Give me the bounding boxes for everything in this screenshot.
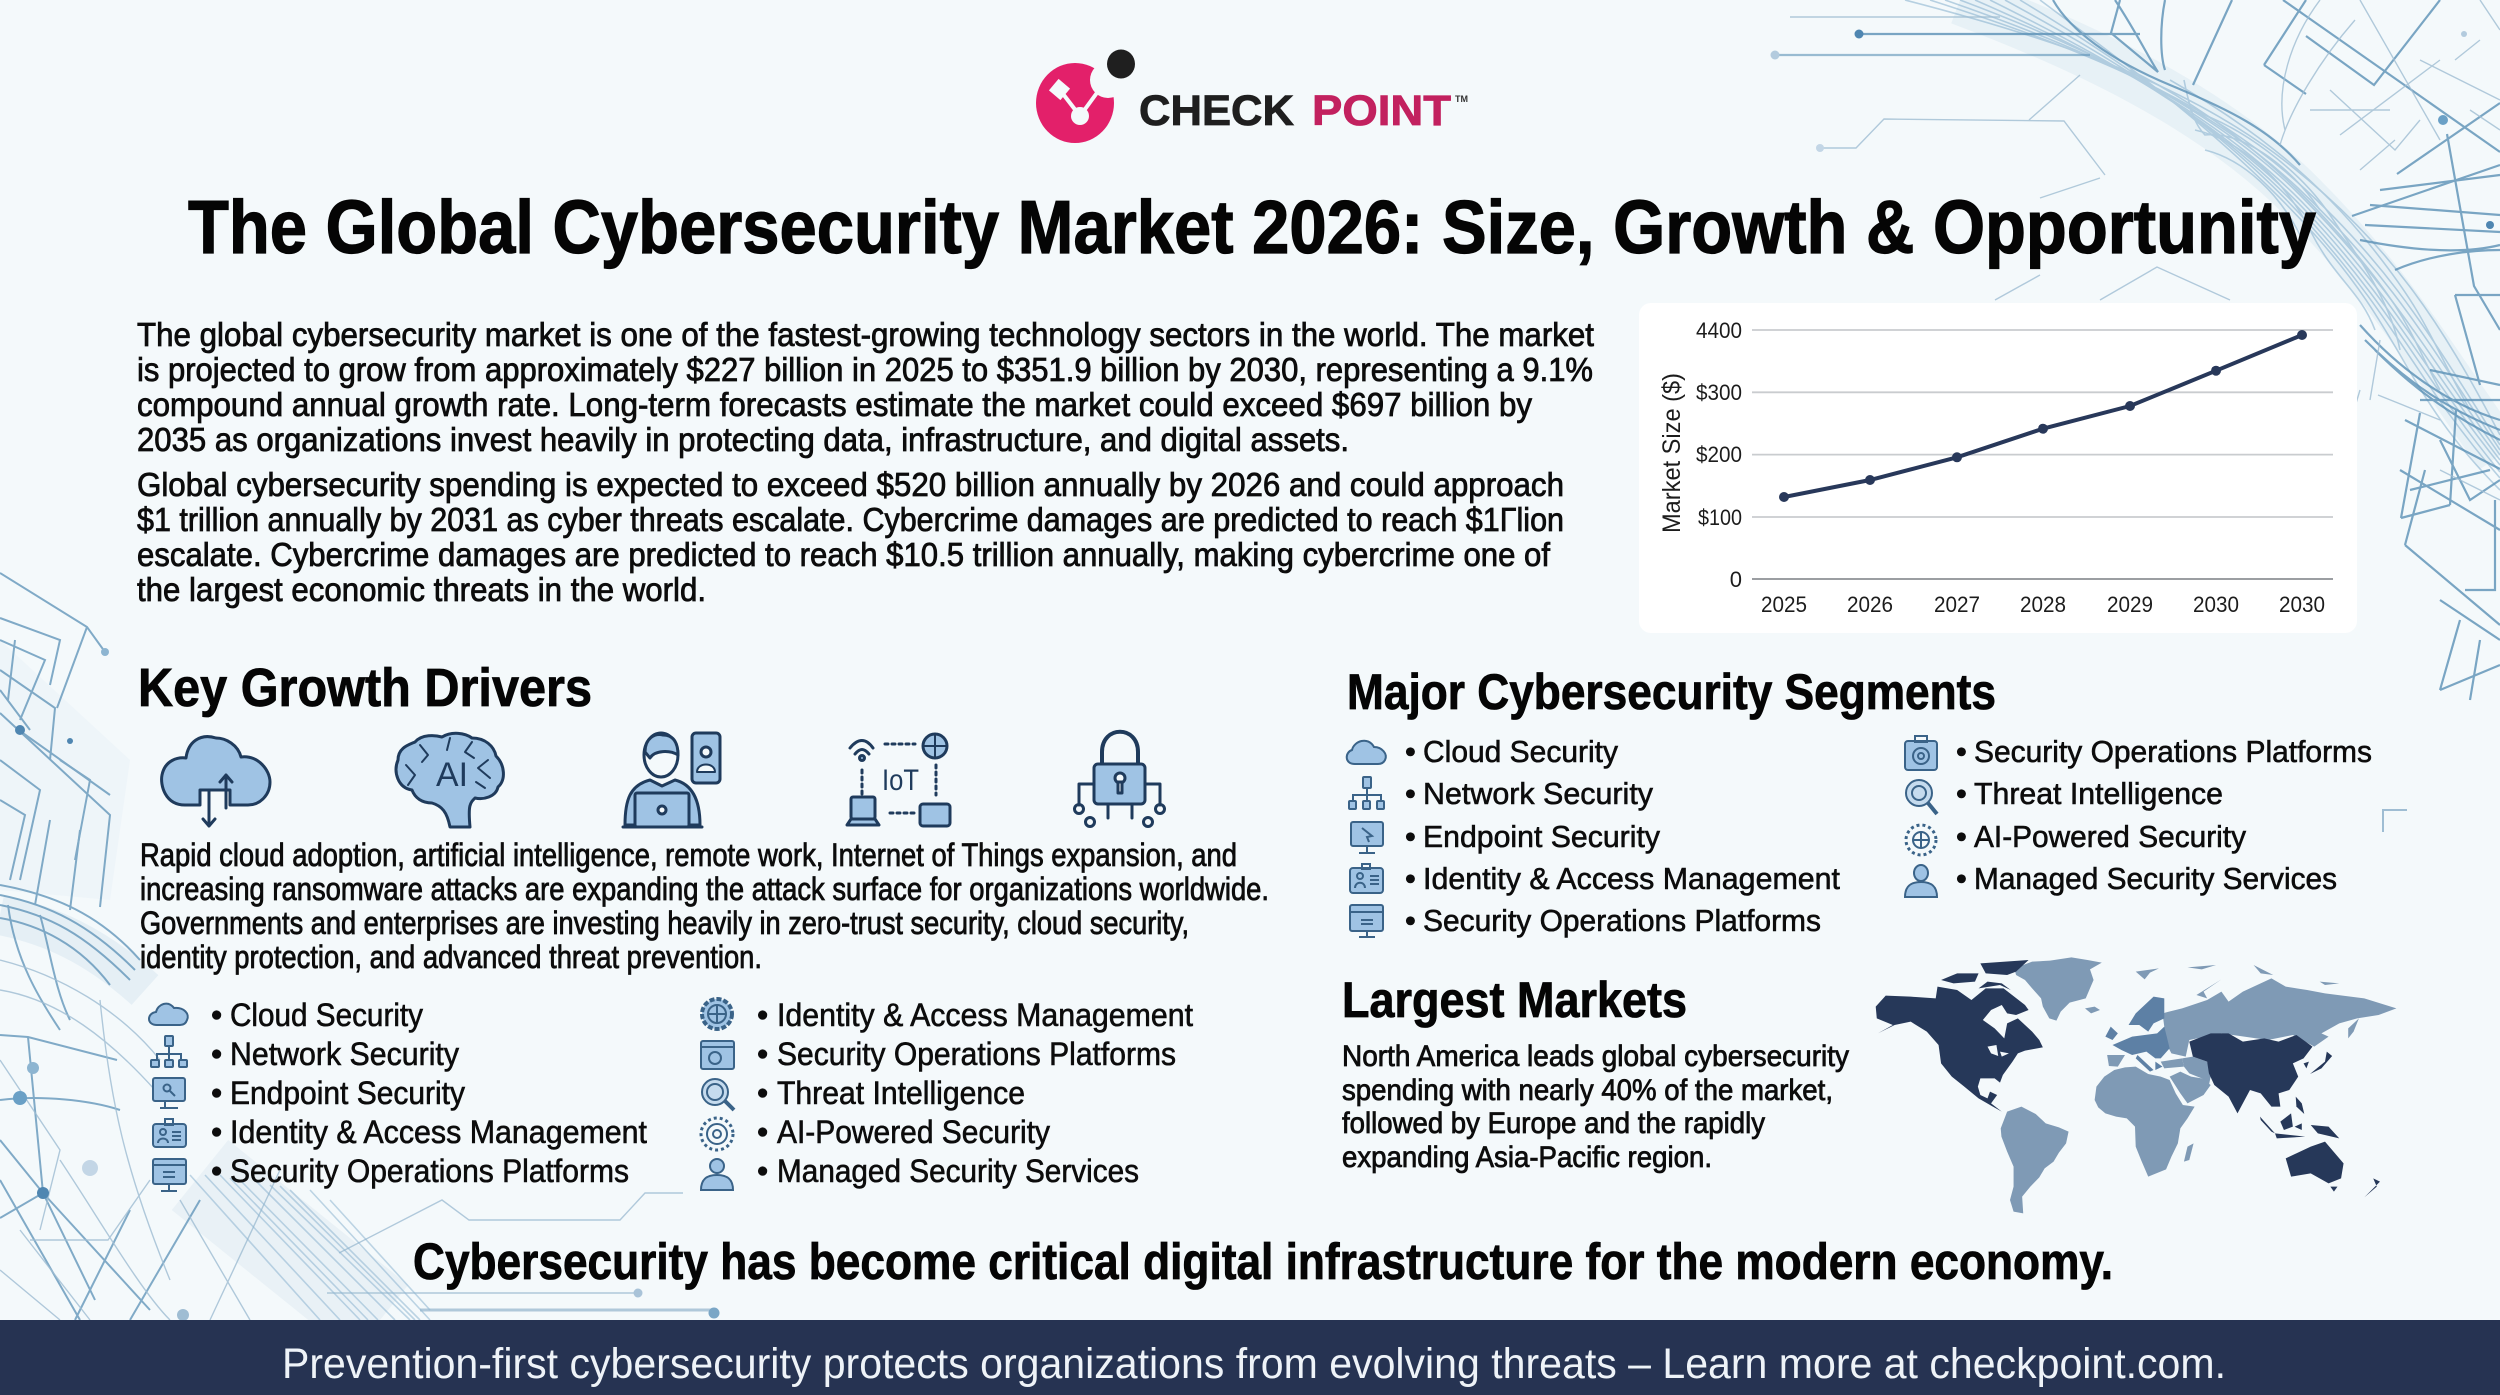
segment labels right: • [1956,734,1967,769]
segment labels right: Security Operations Platforms [1974,734,2372,769]
heading: major cybersecurity segments: Major Cybersecurity Segments [1347,664,1996,720]
footer text: Prevention-first cybersecurity protects organizations from evolving threats – Learn more at checkpoint.com. [282,1340,2226,1388]
icon: remote worker [623,733,720,827]
chart y axis labels: $200 [1696,442,1742,467]
small icon: operations monitor [1350,905,1383,937]
intro paragraph 2: $1 trillion annually by 2031 as cyber threats escalate. Cybercrime damages are predicted to reach $1Γlion [137,501,1564,538]
growth drivers paragraph: Rapid cloud adoption, artificial intelligence, remote work, Internet of Things expansion, and [140,837,1237,873]
left list labels: Endpoint Security [230,1075,465,1111]
small icon: monitor cursor [1351,822,1383,853]
segment labels left: • [1405,734,1416,769]
chart x axis labels: 2028 [2020,592,2066,617]
list: segments right [1905,734,2372,897]
right list labels [757,997,1193,1189]
icon: AI brain [396,733,503,827]
segment labels left: Network Security [1423,776,1653,811]
background circuit lines: top right [1770,0,2500,832]
intro paragraph 1: compound annual growth rate. Long-term forecasts estimate the market could exceed $697 billion by [137,386,1532,423]
left list labels: Network Security [230,1036,459,1072]
map: great lakes [1987,1045,2009,1057]
chart x axis labels: 2027 [1934,592,1980,617]
chart gridlines [1752,330,2333,579]
chart x axis labels: 2030 [2279,592,2325,617]
right list labels: Identity & Access Management [777,997,1193,1033]
small icon: cloud [149,1004,188,1025]
list: segments left [1347,734,1840,938]
background circuit lines: left and bottom [0,573,720,1321]
list: growth drivers left [149,997,647,1191]
map: leading regions [1876,960,2380,1197]
right list labels: • [757,997,768,1033]
segment labels left [1405,734,1840,938]
largest markets text [1342,1040,1849,1174]
segment labels right: Threat Intelligence [1974,776,2223,811]
small icon: person [1905,865,1937,897]
small icon: AI gear [701,1118,733,1150]
segment labels right: Managed Security Services [1974,861,2337,896]
chart y axis labels: 4400 [1696,318,1742,343]
chart y axis labels [1696,318,1742,592]
world map [1876,957,2396,1213]
right list labels: Threat Intelligence [777,1075,1025,1111]
largest markets text: expanding Asia-Pacific region. [1342,1141,1712,1174]
chart x axis labels: 2030 [2193,592,2239,617]
segment labels left: Cloud Security [1423,734,1618,769]
largest markets text: North America leads global cybersecurity [1342,1040,1849,1073]
intro paragraph 1: 2035 as organizations invest heavily in protecting data, infrastructure, and digital assets. [137,421,1349,458]
intro paragraph 1: is projected to grow from approximately $227 billion in 2025 to $351.9 billion by 2030, representing a 9.1% [137,351,1593,388]
footer banner [0,1320,2500,1395]
small icon: cloud [1347,741,1386,764]
small icon: identity badge [153,1119,186,1147]
logo mark [1036,50,1135,143]
segment labels left: Endpoint Security [1423,819,1660,854]
small icon: gear globe [702,999,732,1029]
small icon: network [1349,777,1384,809]
left list labels: • [211,1153,222,1189]
growth drivers paragraph [140,837,1269,975]
largest markets text: spending with nearly 40% of the market, [1342,1074,1833,1107]
growth drivers paragraph: increasing ransomware attacks are expanding the attack surface for organizations worldwide. [140,871,1269,907]
chart y axis labels: 0 [1730,567,1742,592]
heading: largest markets: Largest Markets [1342,972,1687,1028]
intro paragraph 1 [137,316,1594,458]
chart x axis labels [1761,592,2325,617]
right list labels: • [757,1153,768,1189]
trademark: TM [1455,94,1468,104]
icon: IoT network [847,734,950,826]
small icon: operations monitor [153,1159,186,1191]
small icon: operations window [701,1041,734,1069]
left list labels: • [211,1114,222,1150]
small icon: magnifier [1906,780,1937,814]
left list labels: • [211,1075,222,1111]
largest markets text: followed by Europe and the rapidly [1342,1107,1765,1140]
icon: cloud [162,737,270,826]
small icon: network [151,1036,187,1067]
icon: AI brain: AI [436,756,468,794]
chart x axis labels: 2026 [1847,592,1893,617]
right list labels: • [757,1036,768,1072]
intro paragraph 1: The global cybersecurity market is one of the fastest-growing technology sectors in the world. The market [137,316,1594,353]
right list labels: Managed Security Services [777,1153,1139,1189]
intro paragraph 2: Global cybersecurity spending is expected to exceed $520 billion annually by 2026 and could approach [137,466,1564,503]
logo: Check Point [1036,50,1294,143]
right list labels: • [757,1114,768,1150]
chart y axis labels: $300 [1696,380,1742,405]
chart x axis labels: 2029 [2107,592,2153,617]
icon: padlock [1074,732,1164,826]
right list labels: • [757,1075,768,1111]
segment labels right: AI-Powered Security [1974,819,2246,854]
left list labels: • [211,1036,222,1072]
small icon: monitor search [153,1078,185,1108]
small icon: operations camera [1905,736,1937,770]
right list labels: Security Operations Platforms [777,1036,1176,1072]
right list labels: AI-Powered Security [777,1114,1050,1150]
intro paragraph 2: escalate. Cybercrime damages are predicted to reach $10.5 trillion annually, making cybercrime one of [137,536,1551,573]
heading: key growth drivers: Key Growth Drivers [138,658,592,718]
segment labels left: • [1405,903,1416,938]
left list labels [211,997,647,1189]
small icon: magnifier [702,1079,734,1110]
closing statement: Cybersecurity has become critical digital infrastructure for the modern economy. [413,1233,2113,1290]
logo wordmark POINT: POINT [1312,87,1451,135]
icon: IoT network: IoT [882,764,919,797]
small icon: person [701,1159,733,1190]
chart data line [1779,330,2307,502]
segment labels left: • [1405,819,1416,854]
left list labels: • [211,997,222,1033]
intro paragraph 2 [137,466,1564,608]
small corner bracket [2383,810,2407,832]
small icon: badge [1350,864,1383,893]
small icon: AI globe gear [1906,825,1936,855]
segment labels right: • [1956,861,1967,896]
segment labels left: • [1405,861,1416,896]
segment labels right: • [1956,819,1967,854]
segment labels left: • [1405,776,1416,811]
intro paragraph 2: the largest economic threats in the world. [137,571,706,608]
map: Europe [2105,997,2170,1072]
left list labels: Identity & Access Management [230,1114,647,1150]
left list labels: Cloud Security [230,997,423,1033]
chart y axis title: Market Size ($) [1658,373,1686,533]
growth drivers paragraph: Governments and enterprises are investing heavily in zero-trust security, cloud security, [140,905,1189,941]
segment labels right [1956,734,2372,896]
segment labels left: Security Operations Platforms [1423,903,1821,938]
segment labels left: Identity & Access Management [1423,861,1840,896]
segment labels right: • [1956,776,1967,811]
map: secondary regions [2001,957,2396,1213]
list: growth drivers right [701,997,1193,1190]
logo wordmark: CHECK [1139,87,1294,135]
growth drivers paragraph: identity protection, and advanced threat prevention. [140,939,762,975]
chart x axis labels: 2025 [1761,592,1807,617]
left list labels: Security Operations Platforms [230,1153,629,1189]
chart y axis labels: $100 [1698,505,1742,530]
panel: market size line chart [1639,303,2357,633]
